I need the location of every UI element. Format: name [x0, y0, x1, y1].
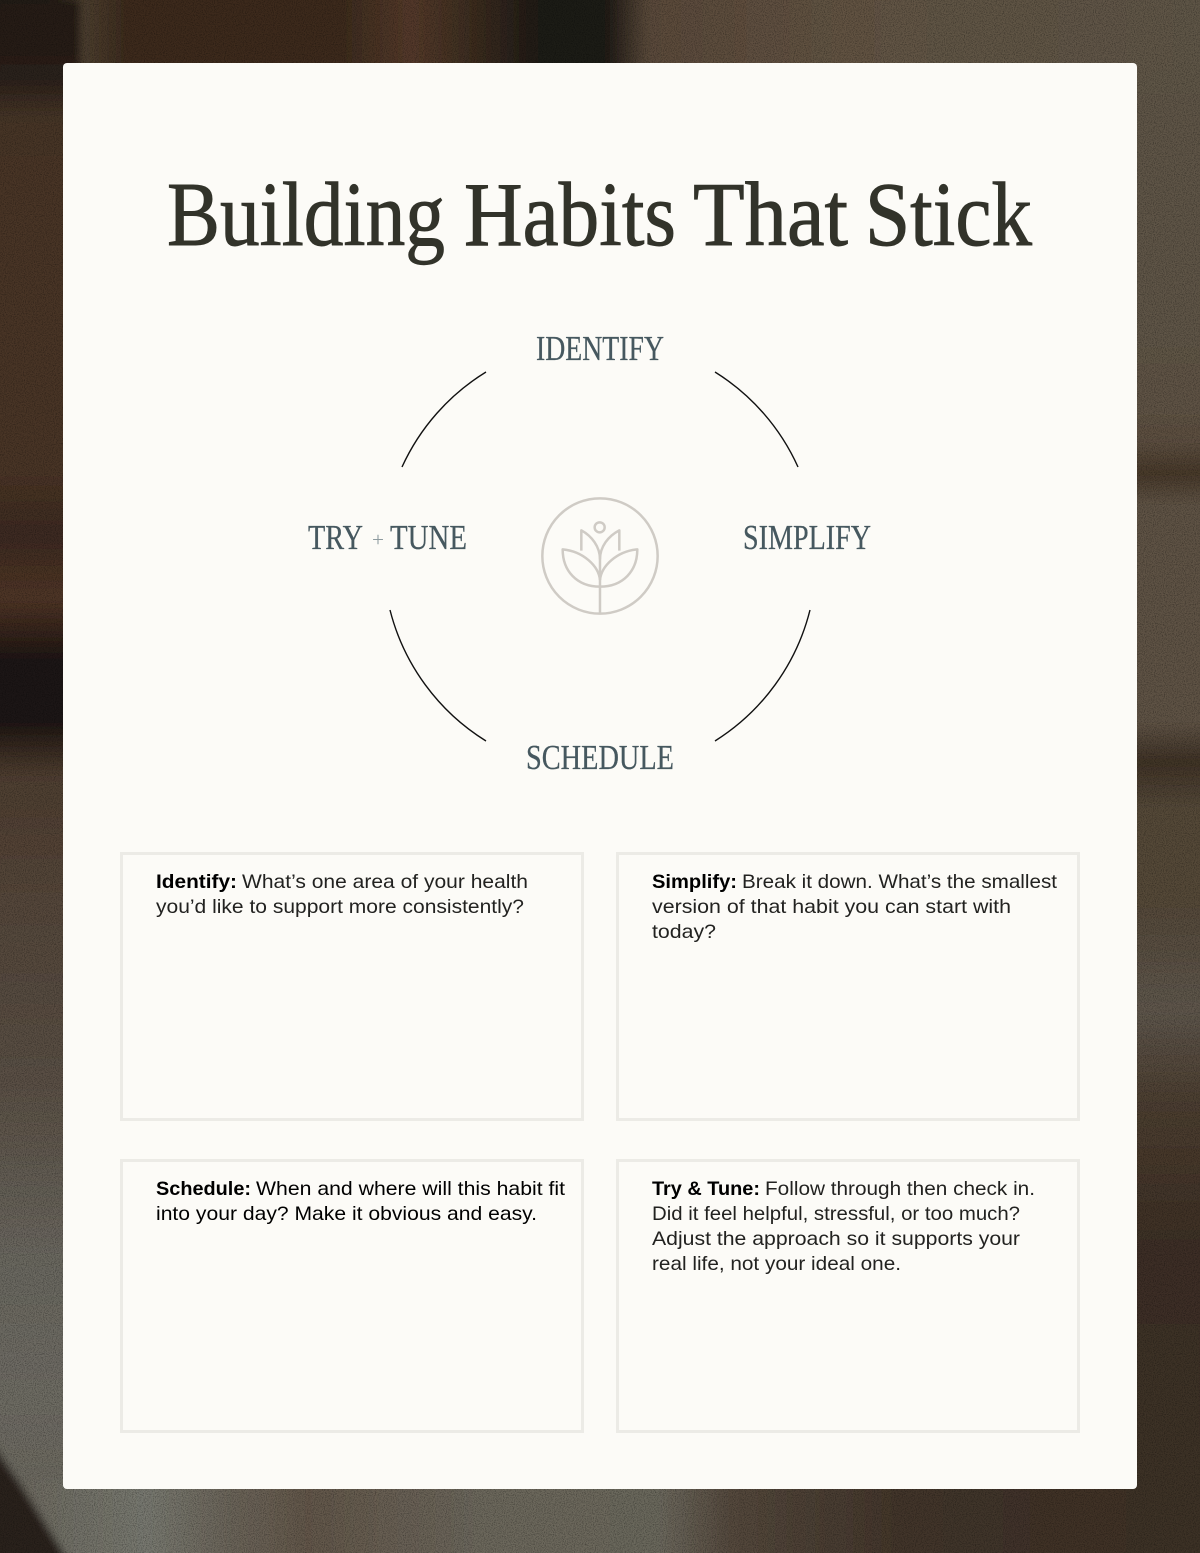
arc: try and tune to identify: [402, 372, 486, 467]
panel: try and tune: [618, 1160, 1078, 1432]
panel: schedule: into your day? Make it obvious and easy.: [156, 1203, 537, 1225]
title: Building: [167, 164, 445, 265]
label: try and tune: +: [372, 529, 384, 551]
icon: lotus in circle: [542, 498, 658, 614]
label: try and tune: TRY: [308, 518, 363, 557]
label: try and tune: [308, 518, 467, 557]
panel: try and tune: Did it feel helpful, stressful, or too much?: [652, 1203, 1020, 1225]
panel: identify: you’d like to support more consistently?: [156, 896, 524, 918]
title: Stick: [865, 164, 1032, 265]
panel: identify: [122, 854, 582, 1120]
panel: identify: Identify:: [156, 871, 237, 893]
cycle diagram: [308, 329, 871, 777]
title: That: [693, 164, 848, 265]
panel: simplify: Simplify:: [652, 871, 737, 893]
panel: schedule: When and where will this habit fit: [256, 1178, 566, 1200]
label: schedule: SCHEDULE: [526, 738, 674, 777]
panel: try and tune: Follow through then check in.: [765, 1178, 1035, 1200]
label: identify: IDENTIFY: [536, 329, 664, 368]
panel: identify: What’s one area of your health: [242, 871, 528, 893]
panel: simplify: version of that habit you can start with: [652, 896, 1011, 918]
label: try and tune: TUNE: [390, 518, 467, 557]
panel: simplify: [618, 854, 1078, 1120]
panel: simplify: today?: [652, 921, 716, 943]
arc: simplify to schedule: [715, 610, 810, 741]
panel: schedule: Schedule:: [156, 1178, 251, 1200]
label: simplify: SIMPLIFY: [743, 518, 871, 557]
arc: schedule to try and tune: [390, 610, 486, 741]
panel: try and tune: Adjust the approach so it supports your: [652, 1228, 1021, 1250]
panel: try and tune: real life, not your ideal one.: [652, 1253, 901, 1275]
title: Habits: [464, 164, 676, 265]
panel: simplify: Break it down. What’s the smallest: [742, 871, 1058, 893]
title: [167, 164, 1032, 265]
arc: identify to simplify: [715, 372, 798, 467]
panel: try and tune: Try & Tune:: [652, 1178, 760, 1200]
panel: schedule: [122, 1160, 582, 1432]
